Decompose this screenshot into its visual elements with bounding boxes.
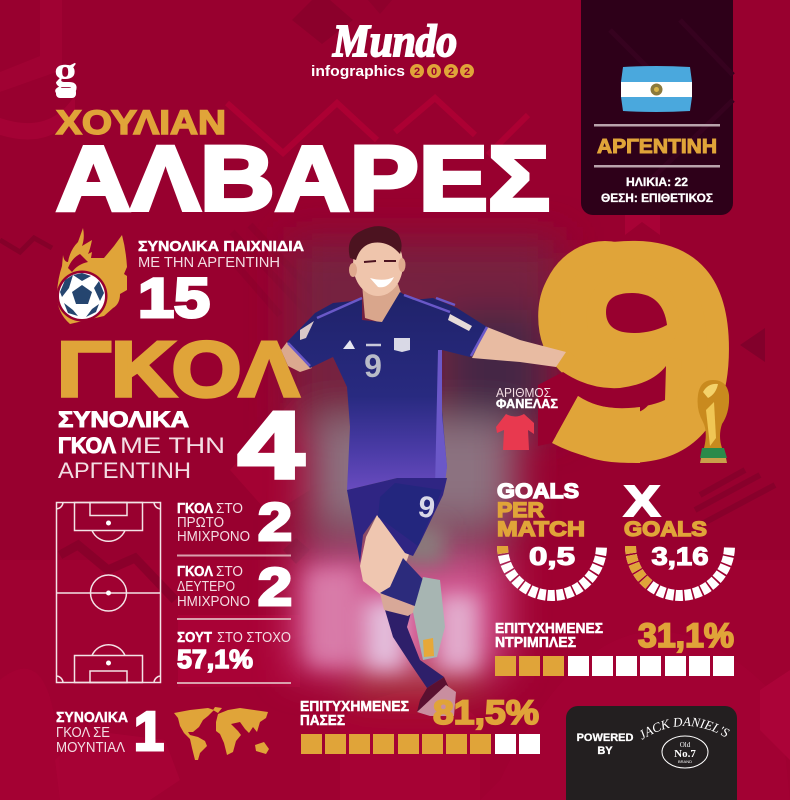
panel: country card xyxy=(581,0,733,215)
age and position xyxy=(601,177,713,205)
stat: successful passes xyxy=(300,694,540,754)
stat: goals second half: ΣΤΟ xyxy=(216,564,243,580)
icon: flaming football xyxy=(56,228,127,324)
stat: expected goals: GOALS xyxy=(624,518,707,541)
stat: goals first half: 2 xyxy=(258,493,292,552)
icon: world map xyxy=(174,707,269,760)
stat: goals per match: PER xyxy=(497,499,544,522)
stat: goals per match: GOALS xyxy=(497,480,579,503)
logo: Jack Daniel's: BRAND xyxy=(678,759,692,764)
games stat block xyxy=(56,228,304,329)
goals stat block xyxy=(57,325,304,499)
goals stat block: 4 xyxy=(238,393,304,499)
jersey number label: ΦΑΝΕΛΑΣ xyxy=(496,397,558,411)
stat: expected goals xyxy=(624,477,730,596)
stat: goals per match xyxy=(497,480,602,596)
photo background: blurred stadium crowd xyxy=(290,240,560,692)
heading: surname: ΑΛΒΑΡΕΣ xyxy=(56,128,550,230)
stat: goals first half: ΠΡΩΤΟ xyxy=(177,515,224,531)
gauge: 0,5 xyxy=(502,546,602,596)
stat: world cup goals: ΜΟΥΝΤΙΑΛ xyxy=(56,740,125,756)
stat: shots on target xyxy=(177,630,291,674)
gauge: 3,16 xyxy=(630,546,730,596)
logo: Mundo infographics 2022: Mundo xyxy=(332,15,457,66)
shorts xyxy=(347,478,447,563)
stat: world cup goals: 1 xyxy=(134,700,164,762)
logo: Jack Daniel's: JACK DANIEL'S xyxy=(640,717,730,740)
logo: Jack Daniel's xyxy=(640,717,730,768)
stat: successful passes: ΕΠΙΤΥΧΗΜΕΝΕΣ xyxy=(300,699,409,715)
age and position: ΗΛΙΚΙΑ: 22 xyxy=(626,177,688,189)
logo: Mundo infographics 2022: 2 xyxy=(414,66,420,78)
big jersey number 9: 9 xyxy=(537,191,731,513)
sponsor panel xyxy=(566,706,737,800)
stat: successful passes: 81,5% xyxy=(433,694,539,732)
logo: Mundo infographics 2022: 2 xyxy=(464,66,470,78)
goals stat block: ΑΡΓΕΝΤΙΝΗ xyxy=(58,458,191,483)
logo: Jack Daniel's: No.7 xyxy=(674,748,696,760)
stat: successful dribbles: ΕΠΙΤΥΧΗΜΕΝΕΣ xyxy=(495,621,603,637)
stat: goals second half: ΓΚΟΛ xyxy=(177,564,213,580)
games stat block: 15 xyxy=(138,266,210,329)
logo: Jack Daniel's: Old xyxy=(680,741,691,749)
logo: Mundo infographics 2022: 2 xyxy=(448,66,454,78)
stat: goals per match: MATCH xyxy=(497,518,585,541)
stat: goals first half: ΓΚΟΛ xyxy=(177,501,213,517)
sponsor panel: BY xyxy=(597,745,613,757)
player photo xyxy=(281,226,566,716)
jersey number label: ΑΡΙΘΜΟΣ xyxy=(496,386,551,400)
heading: first name: ΧΟΥΛΙΑΝ xyxy=(56,104,226,142)
jersey xyxy=(287,292,487,492)
bar: dribbles 3 of 10 xyxy=(495,656,734,676)
stat: world cup goals: ΣΥΝΟΛΙΚΑ xyxy=(56,710,128,726)
stat: expected goals: 3,16 xyxy=(652,543,708,571)
sponsor panel: POWERED xyxy=(577,732,633,744)
stat: successful dribbles: ΝΤΡΙΜΠΛΕΣ xyxy=(495,635,576,651)
icon: Argentina flag xyxy=(621,66,692,112)
stat: world cup goals: ΓΚΟΛ ΣΕ xyxy=(56,725,110,741)
goals stat block: ΓΚΟΛ xyxy=(57,325,299,413)
stat: successful dribbles: 31,1% xyxy=(638,617,734,655)
stat: goals second half xyxy=(177,558,292,617)
stat: goals per match: 0,5 xyxy=(529,543,575,571)
head xyxy=(349,226,406,296)
stat: goals second half: ΗΜΙΧΡΟΝΟ xyxy=(177,594,250,610)
stat: successful dribbles xyxy=(495,617,734,676)
goals stat block: ΜΕ ΤΗΝ xyxy=(120,433,225,458)
stat: goals first half: ΣΤΟ xyxy=(216,501,243,517)
jersey number label xyxy=(496,386,558,450)
logo: g: g xyxy=(54,47,77,96)
logo: Mundo infographics 2022 xyxy=(311,15,474,80)
age and position: ΘΕΣΗ: ΕΠΙΘΕΤΙΚΟΣ xyxy=(601,193,713,205)
stat: expected goals: X xyxy=(624,477,660,526)
icon: world cup trophy xyxy=(698,380,729,463)
stat: goals first half: ΗΜΙΧΡΟΝΟ xyxy=(177,529,250,545)
jersey: 9 xyxy=(364,348,382,384)
stat: shots on target: ΣΤΟ ΣΤΟΧΟ xyxy=(217,630,291,646)
goals stat block: ΓΚΟΛ xyxy=(58,433,116,458)
icon: shirt xyxy=(496,414,534,450)
stat: goals second half: ΔΕΥΤΕΡΟ xyxy=(177,579,235,595)
bar: passes 8 of 10 xyxy=(301,734,540,754)
stat: goals first half xyxy=(177,493,292,552)
stat: shots on target: ΣΟΥΤ xyxy=(177,630,212,646)
stat: goals second half: 2 xyxy=(258,558,292,617)
player photo: 9 xyxy=(416,490,437,525)
games stat block: ΣΥΝΟΛΙΚΑ ΠΑΙΧΝΙΔΙΑ xyxy=(138,238,304,255)
stat: successful passes: ΠΑΣΕΣ xyxy=(300,713,345,729)
stat: shots on target: 57,1% xyxy=(177,644,253,674)
logo: Mundo infographics 2022: infographics xyxy=(311,63,405,80)
goals stat block: ΣΥΝΟΛΙΚΑ xyxy=(58,407,189,432)
stat: world cup goals xyxy=(56,700,269,762)
icon: football pitch xyxy=(56,502,160,682)
country name: ΑΡΓΕΝΤΙΝΗ xyxy=(597,136,717,158)
games stat block: ΜΕ ΤΗΝ ΑΡΓΕΝΤΙΝΗ xyxy=(138,254,280,271)
logo: Mundo infographics 2022: 0 xyxy=(431,66,437,78)
